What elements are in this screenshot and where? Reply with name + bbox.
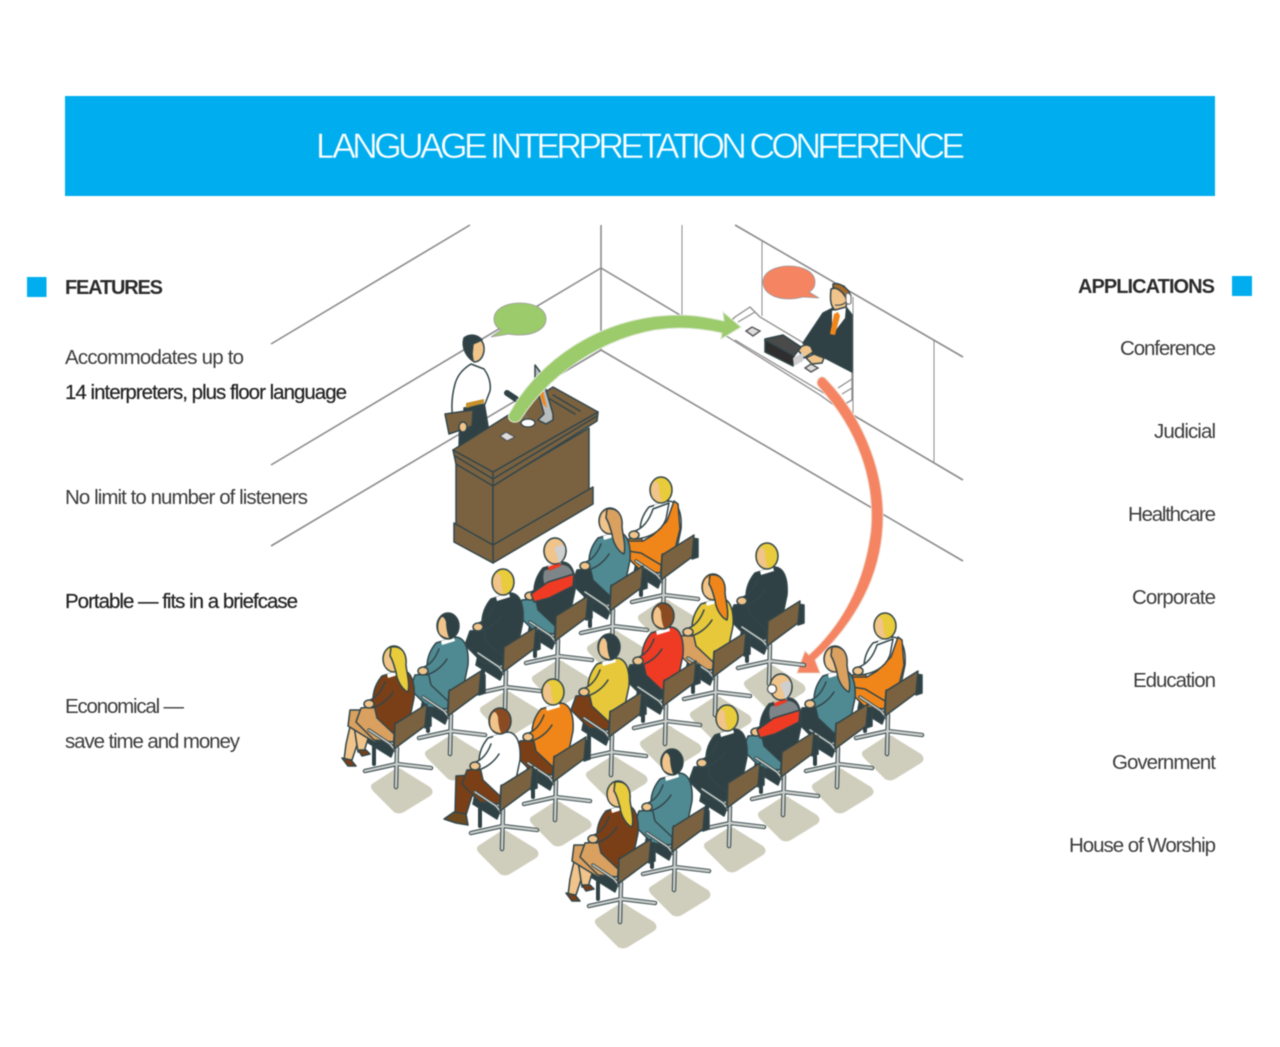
speaker trousers bbox=[459, 402, 490, 455]
speaker folder bbox=[445, 410, 473, 434]
row 3 seat 1: brown top woman bbox=[566, 781, 655, 922]
row 3 seat 4: red and grey jacket with headset bbox=[743, 674, 818, 815]
row 1 seat 2: teal suit bbox=[410, 613, 485, 754]
row 2 seat 3: yellow vest bbox=[571, 634, 646, 775]
lectern receiver bbox=[500, 432, 515, 441]
arrow: interpreter to audience bbox=[797, 377, 883, 673]
speech bubble: speaker bbox=[491, 303, 546, 337]
lectern microphone bbox=[507, 393, 535, 427]
feature: economical: Economical — bbox=[65, 695, 184, 718]
floor shadows under chairs bbox=[371, 600, 924, 948]
row 3 seat 3: black suit bbox=[689, 705, 764, 846]
room wall lines bbox=[271, 225, 963, 561]
row 2 seat 6: black suit bbox=[729, 543, 804, 684]
speaker shirt bbox=[452, 364, 490, 422]
features heading: FEATURES bbox=[65, 277, 163, 299]
arrow: speaker to interpreter bbox=[508, 312, 741, 422]
features square marker bbox=[27, 277, 46, 297]
row 3 seat 6: overalls bbox=[847, 613, 922, 754]
row 1 seat 1: brown top woman bbox=[342, 646, 431, 787]
seated audience bbox=[342, 477, 922, 922]
lectern right face bbox=[493, 428, 589, 545]
row 3 seat 2: teal suit bbox=[634, 749, 709, 890]
speaker bbox=[445, 335, 490, 455]
row 3 seat 5: teal jacket woman bbox=[797, 646, 872, 787]
application: conference: Conference bbox=[1120, 337, 1216, 360]
row 1 seat 4: red and grey jacket bbox=[517, 538, 592, 679]
feature: interpreters: Accommodates up to bbox=[65, 346, 244, 369]
interpreter figure bbox=[798, 284, 852, 372]
speaker hand bbox=[459, 422, 467, 432]
desk receiver bbox=[805, 364, 818, 372]
lectern monitor bbox=[535, 365, 553, 424]
lectern top bbox=[453, 387, 598, 472]
lectern left face bbox=[456, 462, 493, 545]
feature: listeners: No limit to number of listeners bbox=[65, 486, 308, 509]
lectern cornice bbox=[453, 412, 598, 486]
application: corporate: Corporate bbox=[1132, 586, 1216, 609]
applications list bbox=[1069, 337, 1216, 857]
speaker head bbox=[470, 337, 484, 362]
row 2 seat 5: yellow top woman bbox=[675, 574, 750, 715]
lectern bbox=[453, 365, 598, 563]
row 1 seat 3: black suit bbox=[465, 569, 540, 710]
title banner bbox=[65, 96, 1215, 196]
feature: portable: Portable — fits in a briefcase bbox=[65, 590, 298, 613]
application: healthcare: Healthcare bbox=[1128, 503, 1216, 526]
speaker belt bbox=[466, 399, 484, 408]
title: LANGUAGE INTERPRETATION CONFERENCE bbox=[316, 126, 965, 166]
desk receiver bbox=[746, 327, 760, 336]
application: government: Government bbox=[1112, 751, 1216, 774]
row 2 seat 1: white shirt bbox=[444, 708, 537, 849]
booth counter bbox=[720, 307, 852, 408]
interpreter booth bbox=[720, 284, 852, 408]
row 2 seat 2: orange vest bbox=[515, 679, 590, 820]
application: house of worship: House of Worship bbox=[1069, 834, 1216, 857]
feature: interpreters second line: 14 interpreters, plus floor language bbox=[65, 381, 347, 404]
feature: economical second line: save time and money bbox=[65, 730, 241, 753]
interpreter console bbox=[765, 335, 804, 366]
row 1 seat 6: overalls bbox=[623, 477, 698, 618]
application: judicial: Judicial bbox=[1154, 420, 1216, 443]
lectern plinth bbox=[454, 487, 593, 563]
applications heading: APPLICATIONS bbox=[1078, 276, 1215, 298]
application: education: Education bbox=[1133, 669, 1216, 692]
features list bbox=[65, 346, 347, 753]
row 1 seat 5: teal jacket woman bbox=[572, 508, 647, 649]
row 2 seat 4: red top woman bbox=[625, 603, 700, 744]
speech bubble: interpreter bbox=[763, 266, 819, 299]
applications square marker bbox=[1232, 276, 1252, 296]
